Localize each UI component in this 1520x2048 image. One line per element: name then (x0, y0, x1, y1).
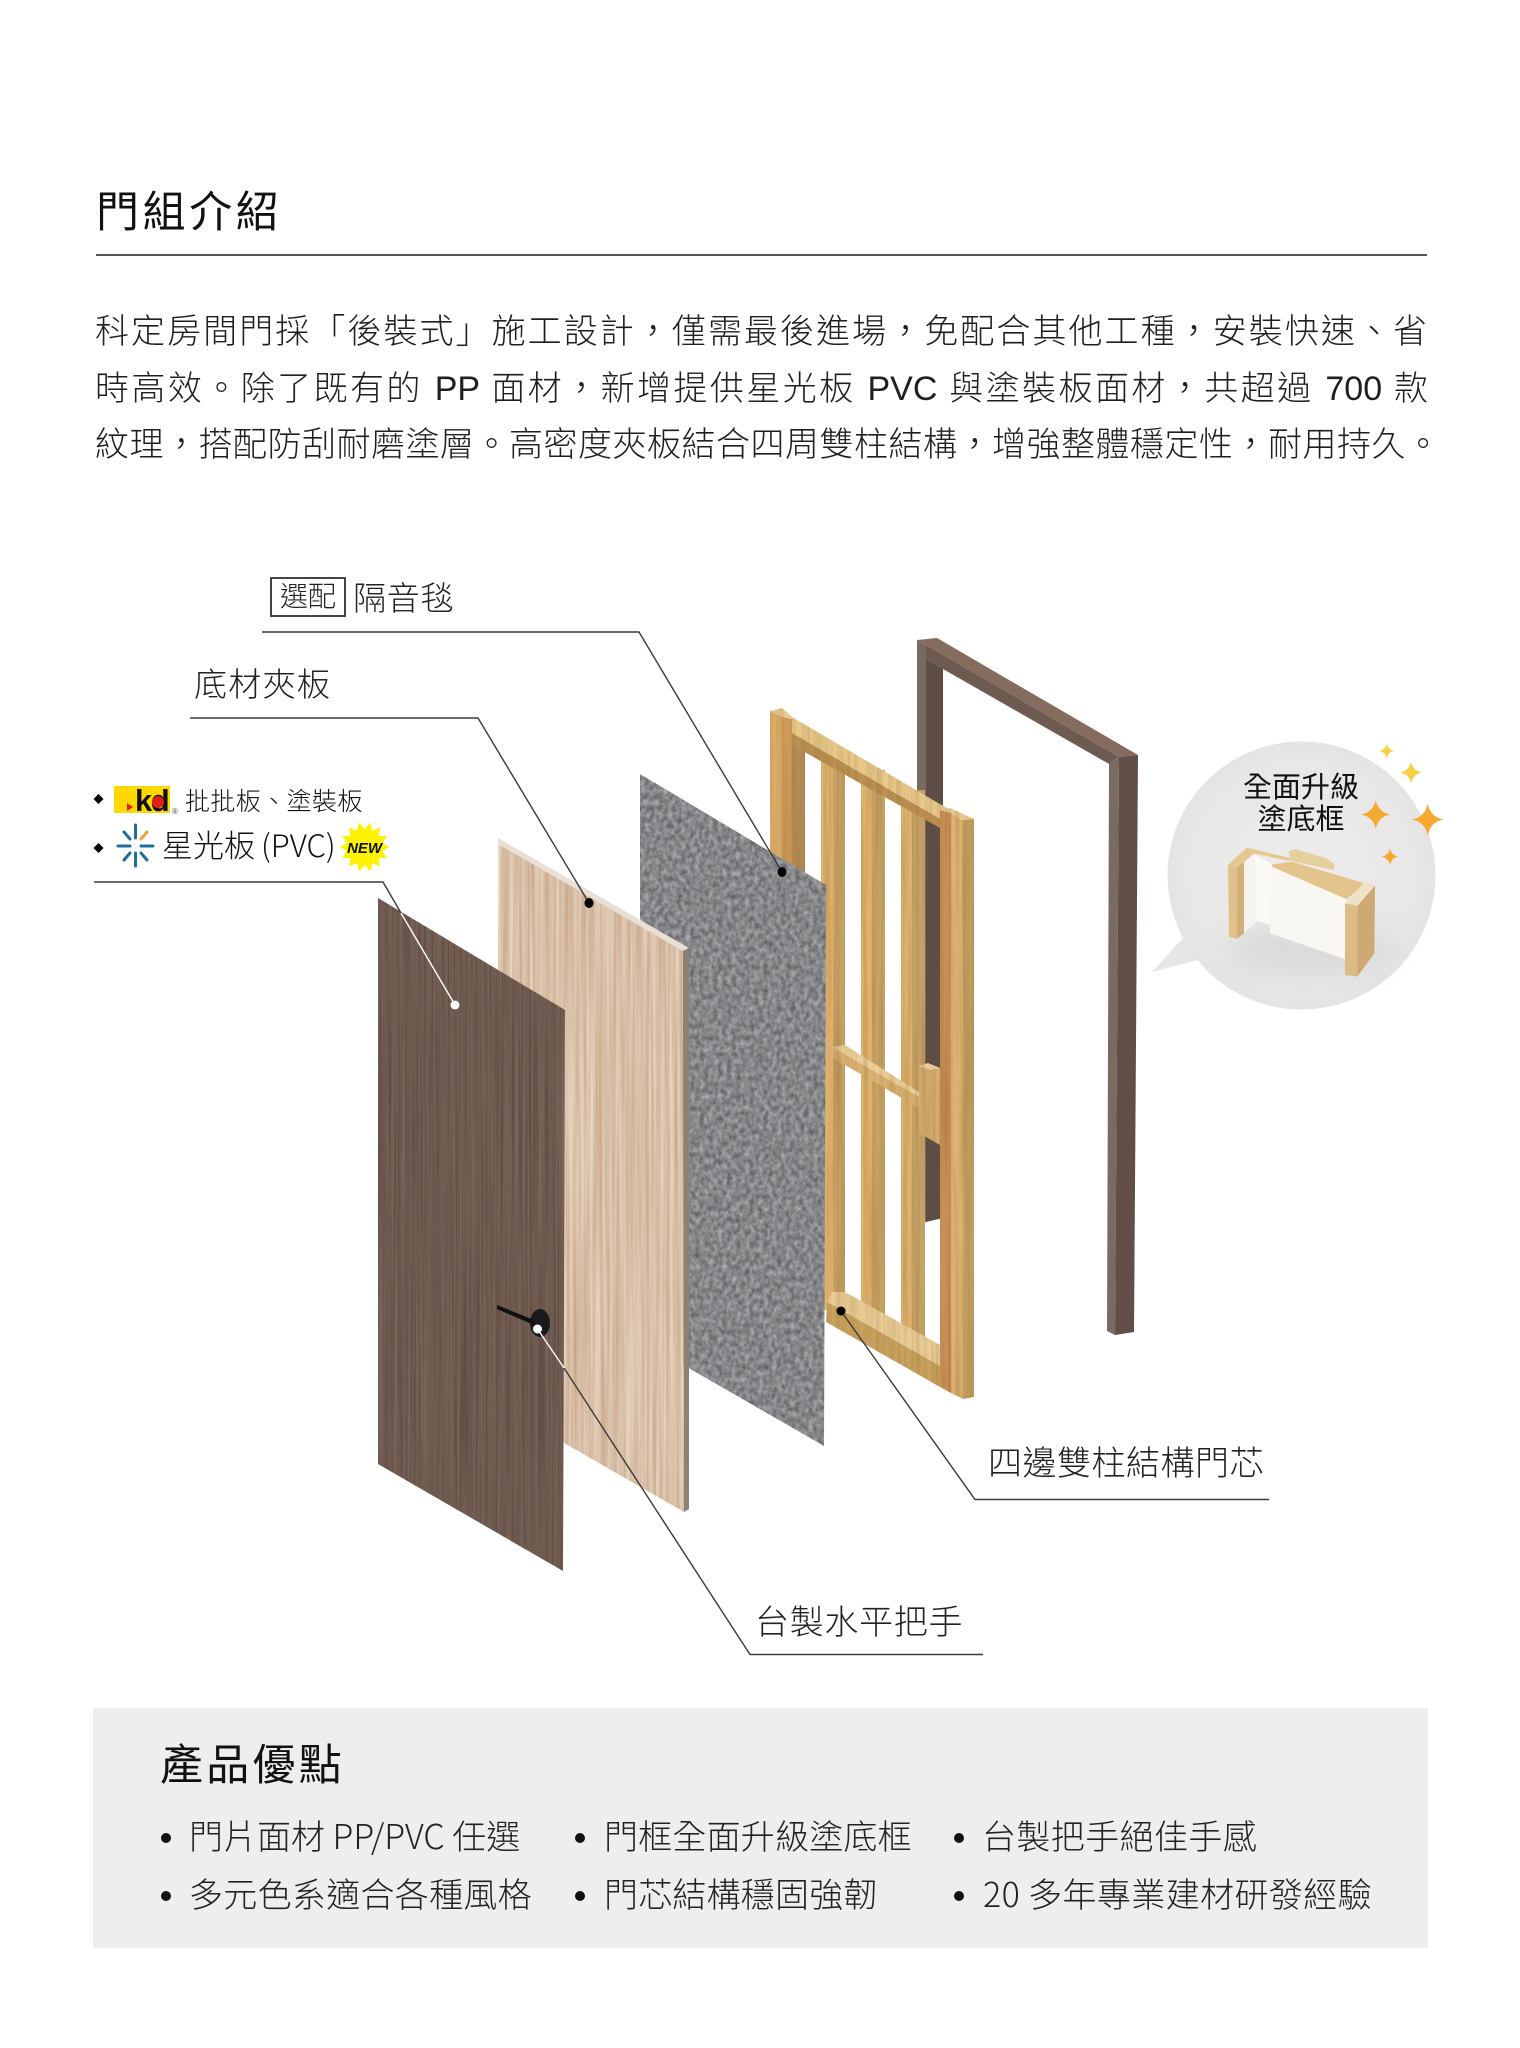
bullets (161, 1833, 964, 1901)
leader: plywood substrate (190, 718, 594, 908)
label: handle: 台製水平把手 (755, 1604, 963, 1642)
intro paragraph (95, 313, 1440, 464)
door core: double-post wood frame (770, 708, 974, 1399)
panel: product advantages (93, 1708, 1428, 1948)
label: kd and painted panels: 批批板、塗裝板 (185, 788, 363, 816)
badge: NEW: NEW (347, 840, 384, 857)
list item: 20 多年專業建材研發經驗 (983, 1868, 1372, 1917)
label: plywood substrate: 底材夾板 (194, 666, 331, 703)
label: door core: 四邊雙柱結構門芯 (988, 1444, 1264, 1482)
list item: 門芯結構穩固強韌 (604, 1877, 878, 1915)
intro paragraph: 時高效。除了既有的 PP 面材，新增提供星光板 PVC 與塗裝板面材，共超過 700 款 (95, 370, 1428, 408)
label: sound-insulation felt: 隔音毯 (353, 580, 454, 617)
leader: door core (836, 1306, 1269, 1500)
label: optional tag box (270, 577, 346, 617)
frame sample (1228, 848, 1375, 977)
title rule (96, 254, 1427, 256)
logo: kd: kd (135, 783, 168, 818)
label: starlight PVC: 星光板(PVC) (162, 821, 336, 866)
icon: door handle (497, 1305, 550, 1337)
label: callout text: 全面升級 (1243, 772, 1359, 804)
logo: starlight (118, 825, 153, 866)
intro paragraph: 紋理，搭配防刮耐磨塗層。高密度夾板結合四周雙柱結構，增強整體穩定性，耐用持久。 (95, 426, 1440, 464)
intro paragraph: 科定房間門採「後裝式」施工設計，僅需最後進場，免配合其他工種，安裝快速、省 (95, 313, 1427, 351)
list item: 門片面材 PP/PVC 任選 (189, 1810, 520, 1859)
sparkles (1361, 744, 1443, 865)
plywood substrate panel (498, 838, 689, 1512)
door face panel (378, 898, 565, 1571)
title: 門組介紹 (96, 189, 282, 237)
sound-insulation felt panel (640, 774, 826, 1446)
logo: kd: ® (172, 807, 178, 816)
heading: advantages: 產品優點 (160, 1742, 345, 1790)
list item: 多元色系適合各種風格 (189, 1877, 532, 1915)
bullet diamonds (94, 794, 104, 853)
label: callout text (1243, 772, 1359, 836)
list item: 門框全面升級塗底框 (604, 1819, 912, 1857)
leader: sound-insulation felt (262, 632, 786, 877)
list item: 台製把手絕佳手感 (982, 1819, 1257, 1857)
callout bubble (1152, 742, 1443, 1010)
shadow under frame sample (1225, 924, 1395, 976)
badge: NEW (340, 823, 390, 871)
label: optional tag box: 選配 (280, 581, 336, 612)
leader: door face (94, 882, 460, 1010)
door frame (dark) (917, 638, 1138, 1335)
label: callout text: 塗底框 (1257, 804, 1344, 836)
logo: kd (114, 783, 178, 818)
leader: handle (533, 1324, 983, 1654)
